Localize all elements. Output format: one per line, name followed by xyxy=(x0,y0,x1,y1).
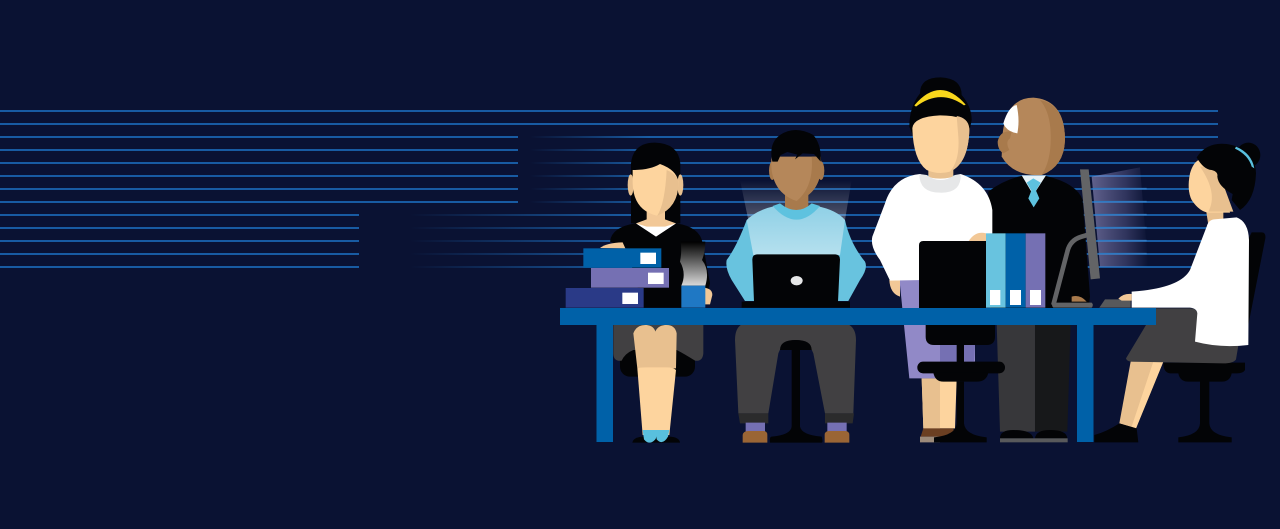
right section of the scene xyxy=(872,77,1265,442)
icon: steaming cup xyxy=(680,242,707,308)
person: man in suit seen from behind xyxy=(988,98,1090,442)
left section of the scene xyxy=(566,130,866,443)
icon: office chair with laptop back xyxy=(917,233,1005,442)
icon: computer monitor with screen glow xyxy=(1052,167,1148,308)
person: seated woman in profile xyxy=(1094,143,1265,442)
icon: stacked binders xyxy=(566,248,669,308)
person: woman in black dress xyxy=(600,143,712,443)
person: man with laptop xyxy=(726,130,866,443)
table xyxy=(560,308,1156,442)
icon: three upright binders xyxy=(986,233,1045,308)
horizontal line pattern xyxy=(0,111,1218,268)
person: woman in white sweater xyxy=(872,77,992,442)
